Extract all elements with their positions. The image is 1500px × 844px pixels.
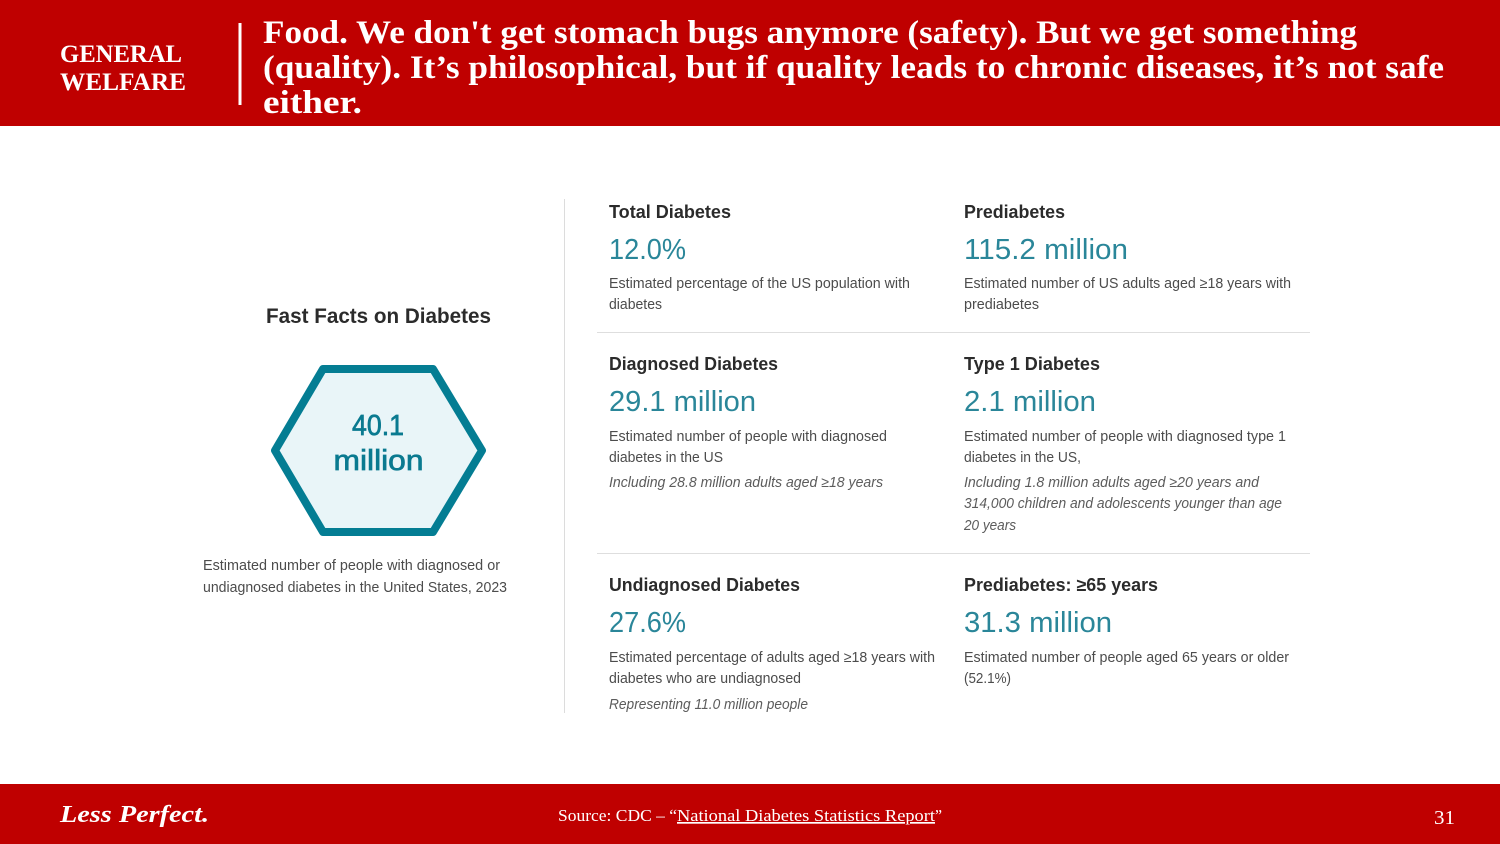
summary caption: undiagnosed diabetes in the United States, 2023 [203,580,507,596]
source citation [558,806,942,825]
header divider [238,23,242,105]
hexagon stat: million [334,445,424,477]
stat: undiagnosed diabetes: diabetes who are undiagnosed [609,671,801,687]
stat: type 1 diabetes: 314,000 children and adolescents younger than age [964,496,1282,512]
stat: undiagnosed diabetes: Estimated percentage of adults aged ≥18 years with [609,650,935,666]
stat: total diabetes: diabetes [609,297,662,313]
stat: prediabetes: prediabetes [964,297,1039,313]
stat: type 1 diabetes: Including 1.8 million adults aged ≥20 years and [964,475,1260,491]
section label [60,41,186,96]
headline: either. [263,85,362,121]
section label: GENERAL [60,41,182,68]
stat: prediabetes: Estimated number of US adults aged ≥18 years with [964,276,1291,292]
stat: diagnosed diabetes: Including 28.8 million adults aged ≥18 years [609,475,883,491]
stat: type 1 diabetes: Type 1 Diabetes [964,354,1100,374]
stat: prediabetes [964,202,1291,313]
source citation: National Diabetes Statistics Report [677,806,935,825]
stat: diagnosed diabetes: Diagnosed Diabetes [609,354,778,374]
stat: prediabetes 65 plus: Prediabetes: ≥65 years [964,575,1158,595]
stat: prediabetes 65 plus: 31.3 million [964,607,1112,639]
headline: Food. We don't get stomach bugs anymore (safety). But we get something [263,15,1357,51]
summary heading: Fast Facts on Diabetes [266,304,491,328]
hexagon stat [275,369,482,532]
stat: diagnosed diabetes [609,354,887,491]
stat: diagnosed diabetes: Estimated number of people with diagnosed [609,429,887,445]
section label: WELFARE [60,69,186,96]
page number: 31 [1434,807,1455,829]
stat: total diabetes: 12.0% [609,234,686,266]
stat: type 1 diabetes: diabetes in the US, [964,450,1081,466]
stat: type 1 diabetes: 2.1 million [964,386,1096,418]
headline: (quality). It’s philosophical, but if quality leads to chronic diseases, it’s not safe [263,50,1444,86]
stat: total diabetes [609,202,910,313]
stat: prediabetes: Prediabetes [964,202,1065,222]
stat: undiagnosed diabetes: Undiagnosed Diabetes [609,575,800,595]
summary caption [203,558,507,596]
stat: diagnosed diabetes: diabetes in the US [609,450,723,466]
stat: type 1 diabetes: 20 years [963,518,1016,534]
footer band [0,784,1500,844]
stat: undiagnosed diabetes: Representing 11.0 million people [609,697,808,713]
stat: prediabetes 65 plus [964,575,1289,687]
source citation: ” [935,806,942,825]
summary caption: Estimated number of people with diagnosed or [203,558,500,574]
stat: type 1 diabetes [963,354,1286,534]
stat: type 1 diabetes: Estimated number of people with diagnosed type 1 [964,429,1286,445]
header band [0,0,1500,126]
stat: total diabetes: Estimated percentage of the US population with [609,276,910,292]
panel: fast facts summary [203,304,507,596]
stat: undiagnosed diabetes [609,575,935,713]
stat: total diabetes: Total Diabetes [609,202,731,222]
headline [263,15,1444,121]
hexagon stat: 40.1 [352,410,404,442]
stat: diagnosed diabetes: 29.1 million [609,386,756,418]
stat: prediabetes 65 plus: (52.1%) [964,671,1011,687]
source citation: Source: CDC – “ [558,806,677,825]
stat: prediabetes 65 plus: Estimated number of people aged 65 years or older [964,650,1289,666]
brand wordmark: Less Perfect. [59,802,209,828]
stat: prediabetes: 115.2 million [964,234,1128,266]
stat: undiagnosed diabetes: 27.6% [609,607,686,639]
